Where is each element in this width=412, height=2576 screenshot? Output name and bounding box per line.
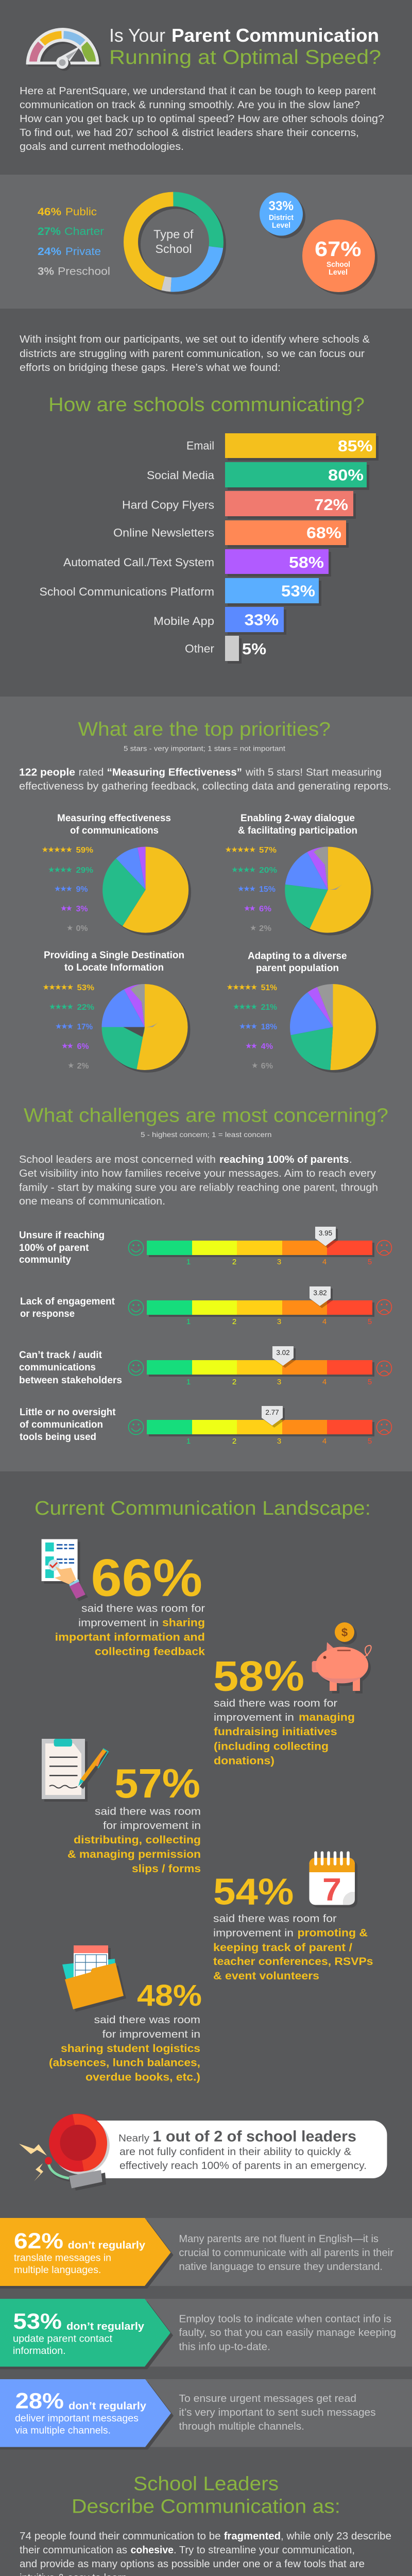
- title: Is Your: [109, 25, 165, 46]
- scale: unsure if reaching parents: [19, 1227, 391, 1266]
- stat: 58 percent: said there was room for: [214, 1697, 337, 1709]
- scale: lack of engagement: or response: [20, 1309, 75, 1319]
- intro text: goals and current methodologies.: [20, 141, 184, 152]
- pie chart: single destination: ★★★★: [49, 1002, 74, 1011]
- pie chart: diverse population: [227, 951, 379, 1073]
- text block: measuring effectiveness: rated: [78, 767, 104, 778]
- scale: little or no oversight: 2: [232, 1437, 236, 1446]
- scale: unsure if reaching parents: 4: [322, 1258, 327, 1266]
- stat: 66 percent: improvement in: [78, 1617, 159, 1629]
- pie chart: two-way dialogue: 6%: [259, 905, 271, 913]
- icon: piggy bank: [312, 1622, 371, 1693]
- bubble: school level: [302, 219, 377, 295]
- banner: translation: don’t regularly: [68, 2240, 146, 2251]
- bubble: district level: 33%: [269, 199, 294, 213]
- icon: piggy bank: $: [341, 1626, 348, 1639]
- stat: 58 percent: managing: [299, 1711, 355, 1723]
- legend: type of school: 24%: [38, 246, 61, 258]
- scale: cannot track communications: 3.02: [276, 1349, 290, 1357]
- text block: fragmented versus cohesive: [20, 2530, 391, 2576]
- stat: 57 percent: slips / forms: [132, 1863, 201, 1875]
- pie chart: diverse population: 18%: [261, 1023, 277, 1031]
- bubble: school level: School: [327, 260, 350, 269]
- stat: 54 percent: said there was room for: [213, 1913, 337, 1925]
- scale: little or no oversight: of communication: [20, 1419, 103, 1430]
- callout: emergency confidence: 1 out of 2 of school leaders: [152, 2128, 356, 2145]
- banner: multiple channels: it’s very important to sent such messages: [179, 2406, 376, 2418]
- text block: fragmented versus cohesive: fragmented: [224, 2530, 281, 2542]
- text block: fragmented versus cohesive: their communication as: [20, 2544, 127, 2556]
- pie chart: measuring effectiveness: 59%: [76, 846, 93, 855]
- scale: lack of engagement: 1: [186, 1317, 191, 1326]
- banner: translation: crucial to communicate with all parents in their: [179, 2247, 393, 2259]
- pie chart: single destination: 6%: [77, 1042, 89, 1051]
- banner: translation: 62%: [14, 2229, 63, 2253]
- stat: 54 percent: 54%: [213, 1871, 294, 1912]
- icon: calendar: 7: [322, 1872, 341, 1908]
- banner: multiple channels: via multiple channels.: [15, 2426, 111, 2436]
- icon: clipboard and pen: [42, 1739, 108, 1802]
- pie chart: measuring effectiveness: [42, 813, 191, 936]
- banner: multiple channels: 28%: [15, 2389, 64, 2414]
- text block: reaching parents: reaching 100% of parents: [219, 1154, 349, 1165]
- text block: efforts on bridging these gaps. Here’s what we found:: [20, 362, 281, 374]
- stat: 58 percent: [213, 1652, 355, 1767]
- bar chart: channels: 33%: [244, 611, 279, 629]
- pie chart: diverse population: 21%: [261, 1003, 277, 1012]
- panel: how schools communicate: [0, 309, 412, 697]
- heading: priorities: What are the top priorities?: [78, 719, 331, 740]
- scale: lack of engagement: Lack of engagement: [20, 1296, 115, 1307]
- scale: little or no oversight: 2.77: [265, 1409, 279, 1416]
- pie chart: diverse population: ★★★★★: [227, 982, 258, 992]
- panel: priorities and challenges: [0, 697, 412, 1471]
- pie chart: two-way dialogue: 2%: [259, 924, 271, 933]
- banner: contact information: update parent contact: [13, 2333, 113, 2344]
- scale: cannot track communications: Can’t track / audit: [19, 1350, 102, 1361]
- legend: type of school: 27%: [38, 226, 61, 238]
- pie chart: single destination: 2%: [77, 1062, 89, 1071]
- scale: unsure if reaching parents: 1: [186, 1258, 191, 1266]
- legend: type of school: [38, 206, 110, 277]
- scale: unsure if reaching parents: 100% of parent: [19, 1243, 89, 1253]
- pie chart: single destination: ★★: [61, 1041, 74, 1050]
- text block: measuring effectiveness: effectiveness by gathering feedback, collecting data and generating reports.: [19, 780, 391, 792]
- pie chart: diverse population: ★★: [245, 1041, 258, 1050]
- text block: fragmented versus cohesive: , while only 23 describe: [281, 2530, 391, 2542]
- stat: 57 percent: & managing permission: [67, 1849, 201, 1860]
- text block: reaching parents: family - start by making sure you are reliably reaching one parent, through: [19, 1181, 378, 1193]
- pie chart: measuring effectiveness: 29%: [76, 866, 93, 875]
- scale: lack of engagement: 3.82: [313, 1289, 327, 1297]
- bar chart: channels: Other: [185, 642, 214, 655]
- scale: lack of engagement: 4: [322, 1317, 327, 1326]
- stat: 48 percent: overdue books, etc.): [85, 2072, 200, 2083]
- pie chart: single destination: 17%: [77, 1023, 93, 1031]
- subheading: star key: 5 stars - very important; 1 stars = not important: [124, 744, 285, 752]
- text block: reaching parents: [19, 1154, 378, 1207]
- pie chart: measuring effectiveness: 9%: [76, 885, 88, 894]
- legend: type of school: 3%: [38, 266, 54, 277]
- pie chart: measuring effectiveness: ★★★★★: [42, 845, 73, 854]
- pie chart: diverse population: ★★★★: [233, 1002, 258, 1011]
- legend: type of school: Charter: [64, 226, 104, 238]
- scale: cannot track communications: 5: [368, 1378, 372, 1386]
- icon: calendar: [309, 1853, 357, 1908]
- donut chart: type of school: Type of: [153, 228, 194, 241]
- bubble: district level: Level: [272, 221, 290, 230]
- stat: 54 percent: keeping track of parent /: [213, 1942, 352, 1954]
- legend: type of school: 46%: [38, 206, 61, 218]
- pie chart: measuring effectiveness: 0%: [76, 924, 88, 933]
- intro text: Here at ParentSquare, we understand that it can be tough to keep parent: [20, 85, 376, 97]
- intro text: [20, 85, 384, 152]
- title: Running at Optimal Speed?: [109, 46, 381, 69]
- pie chart: single destination: ★★★: [55, 1022, 74, 1031]
- banner: translation: Many parents are not fluent in English—it is: [179, 2233, 379, 2245]
- scale: little or no oversight: 1: [186, 1437, 191, 1446]
- stat: 66 percent: important information and: [55, 1632, 205, 1643]
- banner: translation: translate messages in: [14, 2253, 111, 2264]
- banner: multiple channels: through multiple channels.: [179, 2420, 304, 2432]
- banner: multiple channels: To ensure urgent messages get read: [179, 2393, 356, 2404]
- bar chart: channels: Social Media: [147, 469, 215, 482]
- pie chart: measuring effectiveness: Measuring effectiveness: [57, 813, 171, 824]
- scale: unsure if reaching parents: 5: [368, 1258, 372, 1266]
- pie chart: single destination: to Locate Information: [64, 962, 164, 973]
- pie chart: single destination: [43, 950, 190, 1073]
- stat: 57 percent: [67, 1760, 201, 1875]
- pie chart: two-way dialogue: 57%: [259, 846, 277, 855]
- scale: unsure if reaching parents: 2: [232, 1258, 236, 1266]
- pie chart: two-way dialogue: ★★★: [237, 884, 256, 893]
- bar chart: channels: 53%: [281, 582, 315, 600]
- heading: challenges: What challenges are most concerning?: [24, 1105, 388, 1126]
- pie chart: diverse population: 6%: [261, 1062, 273, 1071]
- pie chart: diverse population: parent population: [256, 963, 339, 974]
- donut chart: type of school: [131, 199, 219, 287]
- banner: contact information: [0, 2299, 412, 2369]
- pie chart: diverse population: 4%: [261, 1042, 273, 1051]
- scale: cannot track communications: between stakeholders: [19, 1375, 122, 1386]
- stat: 58 percent: donations): [214, 1755, 274, 1767]
- banner: contact information: information.: [13, 2346, 66, 2357]
- bar chart: channels: Email: [186, 439, 214, 452]
- banner: multiple channels: don’t regularly: [68, 2400, 147, 2412]
- scale: unsure if reaching parents: community: [19, 1255, 71, 1265]
- donut chart: type of school: School: [156, 242, 192, 256]
- bar chart: channels: 5%: [242, 640, 266, 658]
- stat: 54 percent: teacher conferences, RSVPs: [213, 1956, 373, 1968]
- bubble: district level: [260, 193, 305, 238]
- pie chart: single destination: ★★★★★: [43, 982, 74, 992]
- scale: little or no oversight: 3: [277, 1437, 281, 1446]
- pie chart: measuring effectiveness: ★★: [60, 904, 73, 913]
- scale: cannot track communications: 4: [322, 1378, 327, 1386]
- stat: 54 percent: [213, 1871, 373, 1982]
- pie chart: diverse population: Adapting to a diverse: [248, 951, 347, 961]
- stat: 48 percent: sharing student logistics: [61, 2043, 200, 2055]
- pie chart: measuring effectiveness: ★: [66, 923, 73, 933]
- legend: type of school: Private: [65, 246, 101, 258]
- title: [109, 25, 381, 69]
- stat: 48 percent: 48%: [137, 1979, 202, 2012]
- icon: folder with documents: [62, 1945, 126, 2012]
- legend: type of school: Public: [65, 206, 97, 218]
- pie chart: two-way dialogue: ★★★★: [231, 865, 256, 874]
- pie chart: diverse population: 51%: [261, 984, 277, 992]
- bar chart: channels: Hard Copy Flyers: [122, 499, 214, 511]
- stat: 58 percent: 58%: [213, 1652, 304, 1700]
- pie chart: two-way dialogue: & facilitating participation: [238, 825, 357, 836]
- bar chart: channels: 80%: [328, 466, 364, 484]
- text block: With insight from our participants, we set out to identify where schools &: [20, 333, 370, 345]
- text block: reaching parents: Get visibility into how families receive your messages. Aim to reach every: [19, 1167, 376, 1179]
- icon: speedometer gauge: [26, 28, 101, 71]
- stat: 57 percent: distributing, collecting: [74, 1834, 201, 1846]
- pie chart: measuring effectiveness: ★★★: [54, 884, 73, 893]
- bar chart: channels: 72%: [314, 496, 348, 514]
- stat: 54 percent: promoting &: [298, 1927, 368, 1939]
- banner: contact information: don’t regularly: [66, 2321, 145, 2332]
- pie chart: two-way dialogue: Enabling 2-way dialogue: [241, 813, 355, 824]
- bar chart: channels: School Communications Platform: [39, 585, 214, 598]
- bar chart: channels: 68%: [306, 524, 341, 542]
- scale: lack of engagement: 3: [277, 1317, 281, 1326]
- pie chart: two-way dialogue: [225, 813, 373, 936]
- stat: 54 percent: & event volunteers: [213, 1970, 319, 1982]
- text block: measuring effectiveness: “Measuring Effectiveness”: [107, 767, 242, 778]
- text block: fragmented versus cohesive: 74 people found their communication to be: [20, 2530, 221, 2542]
- pie chart: measuring effectiveness: ★★★★: [48, 865, 73, 874]
- banner: multiple channels: [0, 2379, 412, 2450]
- callout: emergency confidence: [19, 2114, 387, 2191]
- banner: contact information: faulty, so that you can easily manage keeping: [179, 2327, 396, 2338]
- intro text: How can you get back up to optimal speed? How are other schools doing?: [20, 113, 384, 125]
- bar chart: channels: Mobile App: [153, 615, 214, 628]
- scale: little or no oversight: Little or no oversight: [20, 1407, 116, 1418]
- stat: 66 percent: sharing: [162, 1617, 205, 1629]
- text block: fragmented versus cohesive: cohesive: [131, 2544, 174, 2556]
- scale: lack of engagement: 2: [232, 1317, 236, 1326]
- scale: little or no oversight: [20, 1406, 391, 1446]
- stat: 66 percent: collecting feedback: [95, 1646, 205, 1658]
- banner: translation: multiple languages.: [14, 2265, 101, 2276]
- banner: contact information: Employ tools to indicate when contact info is: [179, 2313, 391, 2325]
- pie chart: single destination: Providing a Single Destination: [44, 950, 184, 961]
- stat: 48 percent: [49, 1979, 202, 2083]
- banner: contact information: 53%: [13, 2309, 62, 2334]
- banner: multiple channels: deliver important messages: [15, 2413, 139, 2424]
- stat: 66 percent: [55, 1549, 205, 1658]
- scale: cannot track communications: [19, 1346, 391, 1386]
- scale: lack of engagement: [20, 1286, 391, 1326]
- scale: unsure if reaching parents: 3: [277, 1258, 281, 1266]
- scale: little or no oversight: 5: [368, 1437, 372, 1446]
- pie chart: single destination: ★: [67, 1061, 74, 1070]
- stat: 57 percent: 57%: [114, 1760, 200, 1806]
- pie chart: measuring effectiveness: of communications: [70, 825, 159, 836]
- scale: unsure if reaching parents: Unsure if reaching: [19, 1230, 105, 1241]
- text block: [20, 333, 370, 374]
- scale: little or no oversight: 4: [322, 1437, 327, 1446]
- subheading: concern key: 5 - highest concern; 1 = least concern: [141, 1130, 272, 1139]
- stat: 66 percent: 66%: [91, 1549, 202, 1607]
- stat: 48 percent: said there was room: [94, 2014, 200, 2026]
- intro text: communication on track & running smoothly. Are you in the slow lane?: [20, 99, 360, 111]
- pie chart: measuring effectiveness: 3%: [76, 905, 88, 913]
- text block: reaching parents: one means of communication.: [19, 1195, 165, 1207]
- bar chart: channels: [39, 433, 379, 664]
- stat: 54 percent: improvement in: [213, 1927, 294, 1939]
- pie chart: diverse population: ★: [251, 1061, 258, 1070]
- text block: fragmented versus cohesive: . Try to streamline your communication,: [174, 2544, 355, 2556]
- stat: 66 percent: said there was room for: [81, 1603, 205, 1615]
- callout: emergency confidence: effectively reach 100% of parents in an emergency.: [119, 2160, 367, 2172]
- panel: header: [0, 0, 412, 175]
- banner: translation: [0, 2218, 412, 2289]
- pie chart: single destination: 22%: [77, 1003, 94, 1012]
- text block: fragmented versus cohesive: and provide as many options as possible under one or a few tools that are: [20, 2558, 365, 2570]
- bubble: school level: Level: [329, 268, 348, 277]
- heading: How are schools communicating?: [48, 394, 365, 416]
- scale: cannot track communications: 1: [186, 1378, 191, 1386]
- stat: 58 percent: (including collecting: [214, 1740, 329, 1752]
- text block: measuring effectiveness: [19, 767, 391, 792]
- callout: emergency confidence: Nearly: [118, 2133, 150, 2144]
- bar chart: channels: 85%: [338, 437, 373, 455]
- scale: little or no oversight: tools being used: [20, 1432, 96, 1443]
- title: Parent Communication: [171, 25, 379, 46]
- heading: school leaders describe: Describe Communication as:: [72, 2496, 340, 2517]
- pie chart: two-way dialogue: ★★: [244, 904, 256, 913]
- heading: school leaders describe: [72, 2473, 340, 2517]
- panel: communication landscape: [0, 1471, 412, 2576]
- pie chart: single destination: 53%: [77, 984, 94, 992]
- panel: school types: [0, 175, 412, 309]
- icon: checklist and hand: [42, 1539, 88, 1601]
- bar chart: channels: Automated Call./Text System: [63, 556, 214, 569]
- scale: cannot track communications: communications: [19, 1362, 96, 1373]
- pie chart: two-way dialogue: 15%: [259, 885, 276, 894]
- bubble: district level: District: [269, 213, 294, 222]
- pie chart: two-way dialogue: 20%: [259, 866, 277, 875]
- heading: landscape: Current Communication Landscape:: [35, 1498, 371, 1519]
- stat: 58 percent: improvement in: [214, 1711, 294, 1723]
- scale: lack of engagement: 5: [368, 1317, 372, 1326]
- intro text: To find out, we had 207 school & district leaders share their concerns,: [20, 127, 359, 139]
- callout: emergency confidence: are not fully confident in their ability to quickly &: [119, 2146, 351, 2158]
- text block: reaching parents: .: [349, 1154, 352, 1165]
- scale: cannot track communications: 2: [232, 1378, 236, 1386]
- heading: school leaders describe: School Leaders: [133, 2473, 279, 2495]
- stat: 58 percent: fundraising initiatives: [214, 1726, 337, 1738]
- stat: 57 percent: said there was room: [95, 1805, 201, 1818]
- legend: type of school: Preschool: [58, 266, 110, 277]
- text block: reaching parents: School leaders are most concerned with: [19, 1154, 216, 1165]
- text block: districts are struggling with parent communication, so we can focus our: [20, 348, 365, 360]
- bar chart: channels: Online Newsletters: [113, 527, 214, 539]
- text block: measuring effectiveness: with 5 stars! Start measuring: [245, 767, 382, 778]
- pie chart: diverse population: ★★★: [239, 1022, 258, 1031]
- banner: contact information: this info up-to-date.: [179, 2341, 270, 2352]
- scale: unsure if reaching parents: 3.95: [319, 1229, 332, 1237]
- stat: 57 percent: for improvement in: [103, 1820, 201, 1832]
- bubble: school level: 67%: [315, 237, 362, 261]
- pie chart: two-way dialogue: ★★★★★: [225, 845, 256, 854]
- stat: 48 percent: for improvement in: [102, 2028, 200, 2040]
- banner: translation: native language to ensure they understand.: [179, 2261, 383, 2273]
- text block: measuring effectiveness: 122 people: [19, 767, 75, 778]
- bar chart: channels: 58%: [289, 553, 324, 571]
- scale: cannot track communications: 3: [277, 1378, 281, 1386]
- stat: 48 percent: (absences, lunch balances,: [49, 2057, 200, 2069]
- pie chart: two-way dialogue: ★: [250, 923, 256, 933]
